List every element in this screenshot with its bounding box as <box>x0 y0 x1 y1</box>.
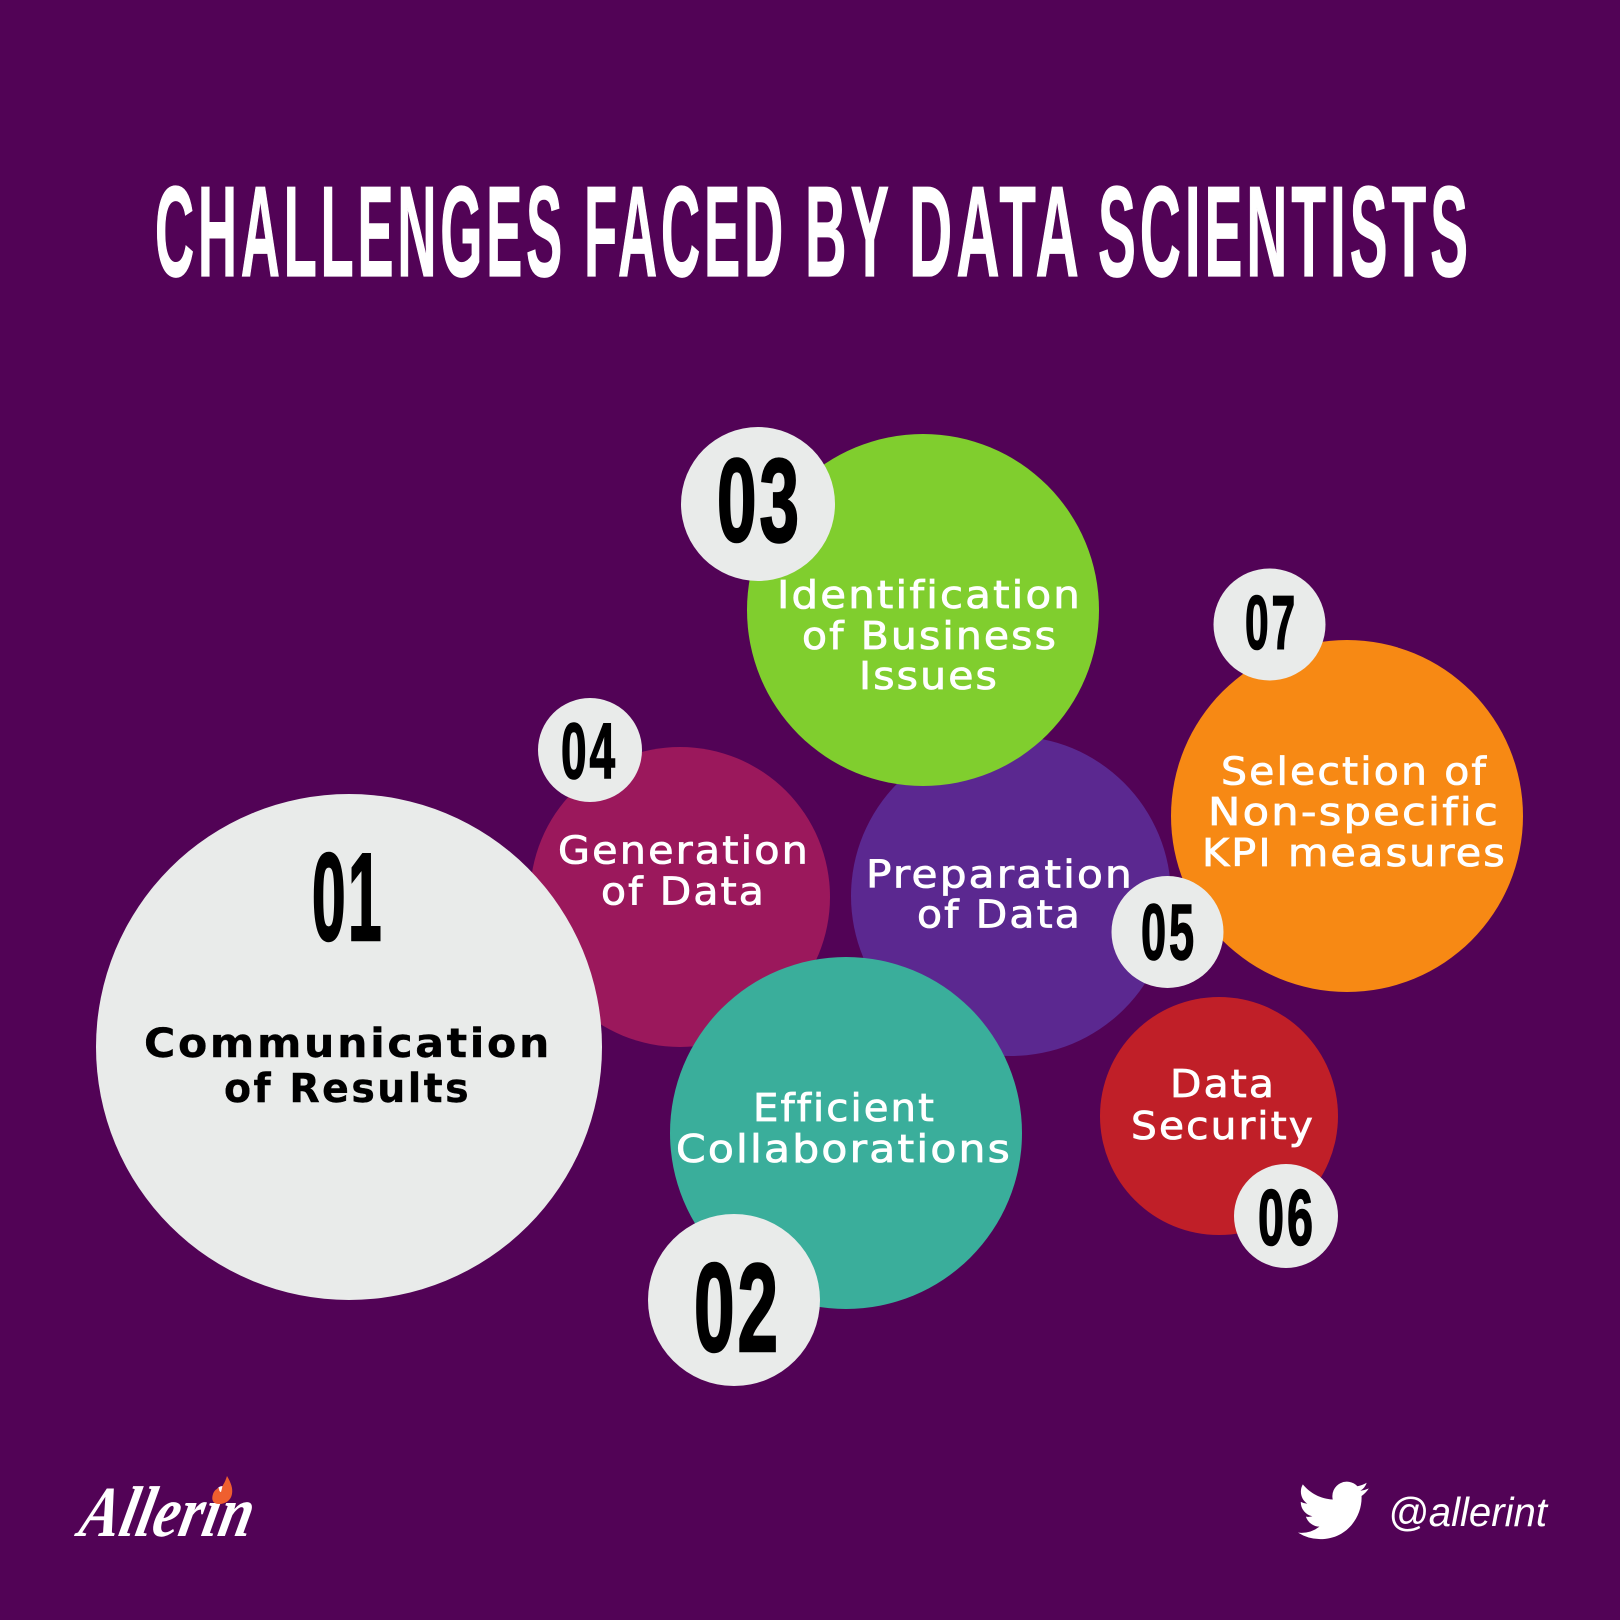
panel: 03 Identification of Business Issues: Issues <box>859 654 999 699</box>
badge: 04: 04 <box>561 706 618 795</box>
badge: 02: 02 <box>694 1239 781 1378</box>
badge: 04 <box>538 698 642 802</box>
panel: 01 Communication of Results: of Results <box>224 1066 471 1112</box>
badge: 07 <box>1214 568 1326 680</box>
badge: 03 <box>681 427 835 581</box>
panel: 07 Selection of Non-specific KPI measures: Non-specific <box>1208 790 1500 835</box>
icon: twitter bird <box>1298 1482 1369 1539</box>
badge: 05: 05 <box>1141 887 1197 976</box>
panel: 02 Efficient Collaborations <box>670 957 1022 1309</box>
panel: 06 Data Security: Data <box>1170 1062 1276 1107</box>
panel: 03 Identification of Business Issues: of Business <box>802 614 1058 659</box>
twitter handle: @allerint <box>1388 1489 1549 1535</box>
panel: 02 Efficient Collaborations: Collaborations <box>676 1127 1012 1172</box>
panel: 06 Data Security <box>1100 997 1338 1235</box>
panel: 03 Identification of Business Issues <box>747 434 1099 786</box>
panel: 07 Selection of Non-specific KPI measures <box>1171 640 1523 992</box>
title: BY <box>805 160 893 304</box>
badge: 05 <box>1112 876 1224 988</box>
panel: 01 Communication of Results <box>96 794 602 1300</box>
badge: 06 <box>1234 1164 1338 1268</box>
panel: 01 Communication of Results: 01 <box>312 829 384 967</box>
panel: 05 Preparation of Data: of Data <box>917 892 1082 938</box>
badge: 03: 03 <box>717 435 802 567</box>
title: CHALLENGES <box>155 160 566 304</box>
badge: 07: 07 <box>1245 581 1298 666</box>
panel: 02 Efficient Collaborations: Efficient <box>753 1086 936 1131</box>
title: DATA <box>909 160 1083 304</box>
panel: 04 Generation of Data <box>530 747 830 1047</box>
badge: 06: 06 <box>1258 1172 1316 1262</box>
title: FACED <box>584 160 787 304</box>
panel: 04 Generation of Data: of Data <box>601 870 766 914</box>
panel: 06 Data Security: Security <box>1131 1104 1315 1149</box>
badge: 02 <box>648 1214 820 1386</box>
panel: 05 Preparation of Data <box>851 736 1171 1056</box>
panel: 05 Preparation of Data: Preparation <box>866 852 1134 898</box>
panel: 07 Selection of Non-specific KPI measures: KPI measures <box>1202 831 1507 876</box>
panel: 01 Communication of Results: Communication <box>144 1021 552 1067</box>
panel: 07 Selection of Non-specific KPI measures: Selection of <box>1221 750 1488 794</box>
logo: Allerin: Allerin <box>70 1472 263 1552</box>
panel: 03 Identification of Business Issues: Identification <box>777 573 1082 618</box>
panel: 04 Generation of Data: Generation <box>558 828 810 874</box>
